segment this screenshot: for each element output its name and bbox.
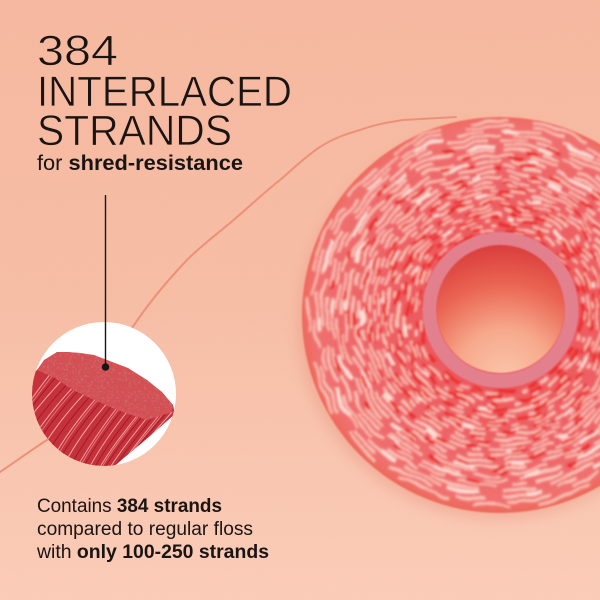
strand bundle [32, 352, 174, 466]
description text: compared to regular floss [37, 519, 253, 540]
spool shadow [298, 125, 600, 519]
description text [36, 496, 269, 563]
title: 384 [37, 27, 118, 75]
description text: with only 100-250 strands [36, 542, 269, 563]
title: INTERLACED [37, 68, 292, 116]
title: STRANDS [37, 107, 232, 155]
pointer line with dot [102, 195, 109, 371]
description text: Contains 384 strands [37, 496, 222, 517]
subtitle: for shred-resistance [37, 152, 243, 175]
floss spool [302, 117, 600, 513]
wound floss streaks [308, 121, 600, 505]
spool body [302, 117, 600, 513]
cut strand ends [37, 352, 173, 420]
floss thread [0, 117, 456, 472]
spool core ring [430, 239, 572, 381]
magnified strand circle [32, 322, 176, 466]
spool hole [436, 245, 564, 373]
title [37, 27, 292, 155]
